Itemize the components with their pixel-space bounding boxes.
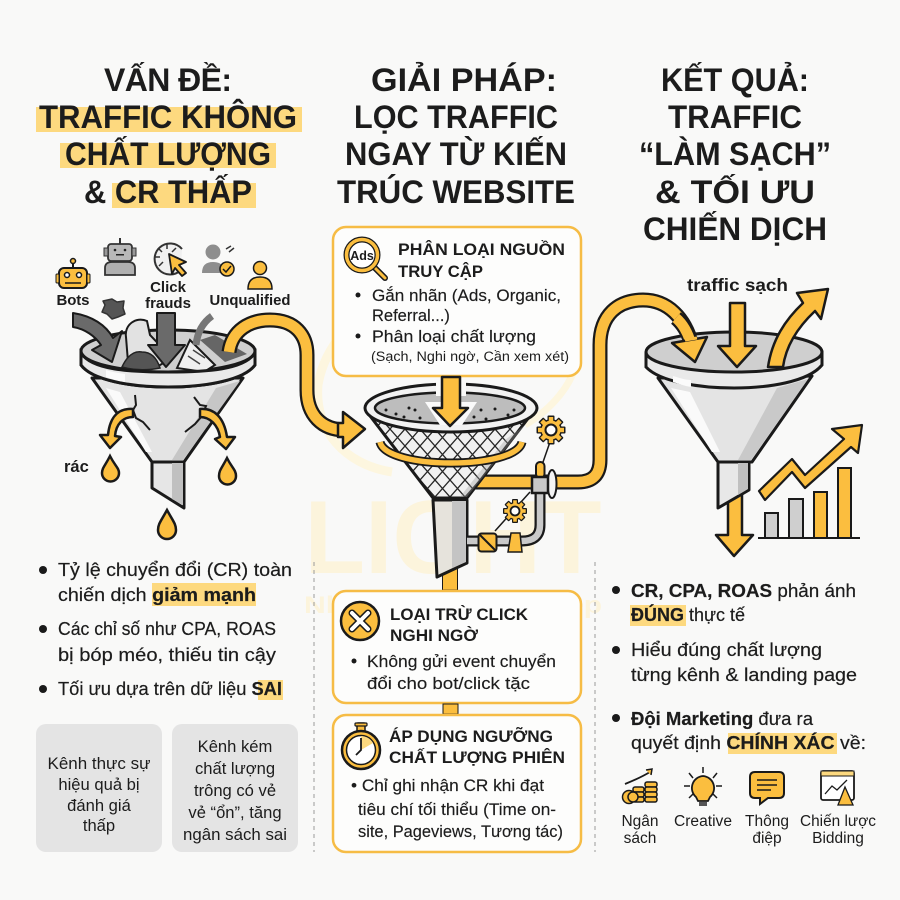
label: Ngân sách: sách [624, 830, 656, 847]
icon: yellow user [248, 262, 272, 289]
debris [102, 299, 125, 319]
panel: classify traffic sources [333, 227, 581, 376]
icon: gray user with check [202, 244, 234, 276]
title: result: & TỐI ƯU [655, 174, 815, 210]
text: result bullets: quyết định CHÍNH XÁC về: [631, 732, 866, 753]
icon: click cursor [155, 243, 186, 276]
card: undervalued channels: đánh giá [67, 796, 132, 815]
panel heading: PHÂN LOẠI NGUỒN [398, 240, 565, 259]
title: solution: GIẢI PHÁP: [371, 62, 557, 98]
funnel: dirty traffic [73, 299, 255, 539]
cracks [133, 395, 206, 432]
title: result: CHIẾN DỊCH [643, 211, 827, 247]
bullets: (Sạch, Nghi ngờ, Cần xem xét) [371, 349, 569, 364]
card: undervalued channels: Kênh thực sự [48, 754, 150, 773]
icon: gray robot [104, 238, 136, 275]
text: problem bullets [39, 559, 292, 700]
label: Ngân sách: Ngân [621, 813, 659, 830]
label: Click frauds: Click [150, 279, 187, 296]
bullets: Phân loại chất lượng [372, 328, 536, 346]
connector between panels [443, 704, 458, 714]
funnel: clean result [646, 332, 822, 508]
icon: message bubble [750, 772, 784, 804]
title: result: TRAFFIC [668, 99, 802, 135]
panel heading [398, 240, 565, 281]
body: đổi cho bot/click tặc [367, 675, 530, 693]
label: Bots: Bots [56, 292, 90, 309]
panel heading: ÁP DỤNG NGƯỠNG [389, 726, 553, 746]
icon: valve pipes and gears [467, 416, 566, 552]
label: rác: rác [64, 458, 89, 476]
label: Creative: Creative [674, 813, 732, 830]
card: overvalued channels: ngân sách sai [183, 825, 287, 844]
title: problem [36, 62, 302, 210]
card: overvalued channels [172, 724, 298, 852]
card: overvalued channels: chất lượng [195, 759, 275, 778]
body: Không gửi event chuyển [367, 653, 556, 671]
arrow: into filter [433, 377, 468, 426]
bullets: Referral...) [372, 307, 450, 325]
label: Click frauds: frauds [145, 295, 191, 312]
watermark [304, 272, 602, 619]
panel heading [389, 726, 565, 767]
title: result: “LÀM SẠCH” [639, 136, 831, 172]
title: problem: VẤN ĐỀ: [104, 62, 232, 98]
label: Chiến lược Bidding: Chiến lược [800, 813, 876, 830]
text: result bullets: CR, CPA, ROAS phản ánh [631, 580, 856, 601]
icon: bidding chart window [821, 771, 854, 805]
title: solution: NGAY TỪ KIẾN [345, 136, 567, 172]
dashed column dividers [314, 562, 595, 852]
text: result bullets [612, 580, 866, 754]
icon: budget coins [622, 769, 657, 804]
yellow crack arrows [100, 409, 235, 449]
bar chart: growth [758, 425, 862, 538]
icon: stopwatch [342, 723, 380, 769]
title: result: KẾT QUẢ: [661, 62, 809, 98]
watermark: LIGHT [304, 480, 602, 596]
body: • Chỉ ghi nhận CR khi đạt [351, 777, 544, 795]
icon: magnifier Ads: Ads [350, 249, 374, 263]
card: undervalued channels: thấp [83, 816, 115, 835]
text: problem bullets: Tỷ lệ chuyển đổi (CR) toàn [58, 559, 292, 580]
panel heading: TRUY CẬP [398, 262, 483, 281]
bullets [356, 286, 569, 364]
icon: lightbulb [684, 767, 722, 806]
label: Chiến lược Bidding: Bidding [812, 830, 864, 847]
label: Thông điệp [745, 813, 789, 847]
body: tiêu chí tối thiểu (Time on- [358, 801, 556, 819]
panel heading: NGHI NGỜ [390, 626, 478, 645]
text: result bullets: từng kênh & landing page [631, 664, 857, 685]
title: problem: & CR THẤP [84, 174, 252, 210]
title: solution [337, 62, 575, 210]
band front [81, 353, 255, 387]
card: undervalued channels: hiệu quả bị [58, 775, 140, 794]
label: traffic sạch: traffic sạch [687, 275, 788, 295]
bullets: Gắn nhãn (Ads, Organic, [372, 286, 561, 305]
body: site, Pageviews, Tương tác) [358, 823, 563, 841]
card: overvalued channels: Kênh kém [198, 737, 272, 756]
icon: yellow robot [56, 258, 90, 288]
label: Thông điệp: điệp [752, 830, 782, 847]
title: solution: LỌC TRAFFIC [354, 99, 558, 135]
body [351, 777, 563, 841]
panel: exclude suspicious clicks [333, 591, 581, 703]
text: result bullets: ĐÚNG thực tế [631, 604, 746, 625]
text: result bullets: Đội Marketing đưa ra [631, 708, 814, 729]
arrow: dirty funnel to filter [229, 320, 365, 448]
text: problem bullets: Các chỉ số như CPA, ROAS [58, 618, 276, 639]
arrows into and up from clean funnel [718, 289, 828, 367]
title: solution: TRÚC WEBSITE [337, 174, 575, 210]
gray arrows [73, 313, 122, 362]
drops [102, 456, 236, 539]
card: undervalued channels [36, 724, 162, 852]
text: problem bullets: chiến dịch giảm mạnh [58, 584, 256, 605]
panel heading: CHẤT LƯỢNG PHIÊN [389, 748, 565, 767]
title: problem: CHẤT LƯỢNG [65, 136, 271, 172]
watermark: Nhanh - Chuẩn - Đẹp [304, 592, 602, 619]
label: Ngân sách [621, 813, 659, 847]
card: overvalued channels: trông có vẻ [194, 781, 276, 800]
text: result bullets: Hiểu đúng chất lượng [631, 639, 822, 660]
card: overvalued channels: vẻ “ổn”, tăng [188, 803, 282, 822]
title: result [639, 62, 831, 247]
label: Click frauds [145, 279, 191, 312]
gear [536, 416, 566, 444]
panel heading: LOẠI TRỪ CLICK [390, 605, 529, 624]
panel heading [390, 605, 529, 645]
arrow: pipe from filter toward result funnel [470, 300, 692, 482]
icon: X circle [341, 602, 379, 640]
gear [503, 499, 527, 523]
arrow: pipe head into clean funnel [672, 318, 707, 362]
label: Unqualified: Unqualified [210, 292, 290, 309]
label: Chiến lược Bidding [800, 813, 876, 847]
text: problem bullets: bị bóp méo, thiếu tin cậy [58, 644, 277, 665]
body [352, 653, 556, 693]
title: problem: TRAFFIC KHÔNG [39, 99, 297, 135]
label: Thông điệp: Thông [745, 813, 789, 830]
text: problem bullets: Tối ưu dựa trên dữ liệu SAI [58, 678, 282, 699]
panel: session quality threshold [333, 715, 581, 852]
funnel: mesh filter [365, 378, 537, 590]
icon: magnifier Ads [346, 240, 385, 278]
arrow: out of clean funnel [716, 490, 753, 556]
